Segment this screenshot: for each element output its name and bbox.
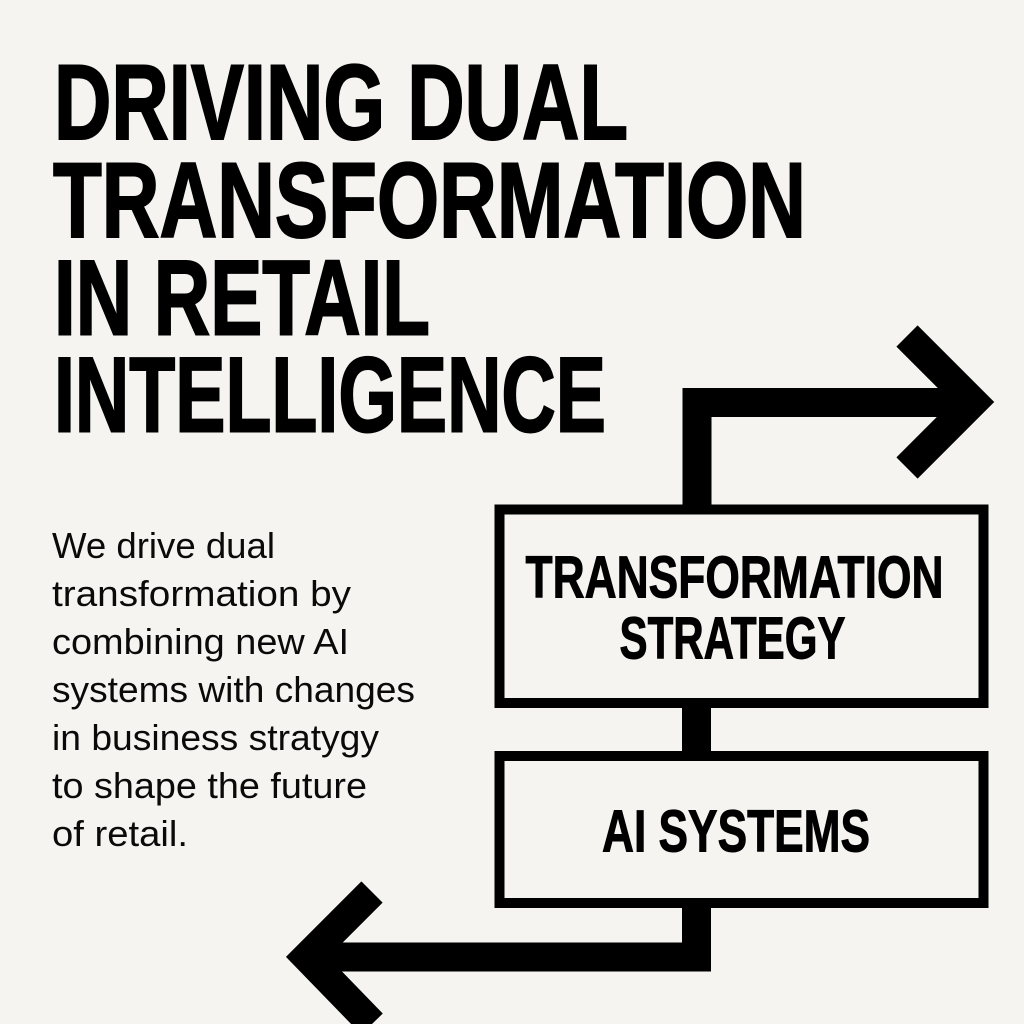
title (53, 42, 806, 455)
body paragraph (52, 525, 415, 854)
body paragraph: of retail. (52, 813, 188, 854)
title: IN RETAIL (54, 238, 430, 358)
box: AI systems: AI SYSTEMS (602, 798, 870, 864)
box: transformation strategy: STRATEGY (620, 606, 846, 672)
box: transformation strategy (500, 510, 984, 703)
body paragraph: We drive dual (52, 525, 275, 566)
arrow: down and left (307, 892, 696, 1024)
body paragraph: to shape the future (52, 765, 367, 806)
body paragraph: systems with changes (52, 669, 415, 710)
body paragraph: in business stratygy (52, 717, 379, 758)
connector between boxes (682, 704, 711, 754)
title: INTELLIGENCE (54, 335, 606, 455)
body paragraph: combining new AI (52, 621, 349, 662)
box: AI systems (500, 756, 984, 903)
body paragraph: transformation by (52, 573, 351, 614)
arrow: up and right (697, 336, 973, 506)
title: DRIVING DUAL (54, 42, 628, 162)
